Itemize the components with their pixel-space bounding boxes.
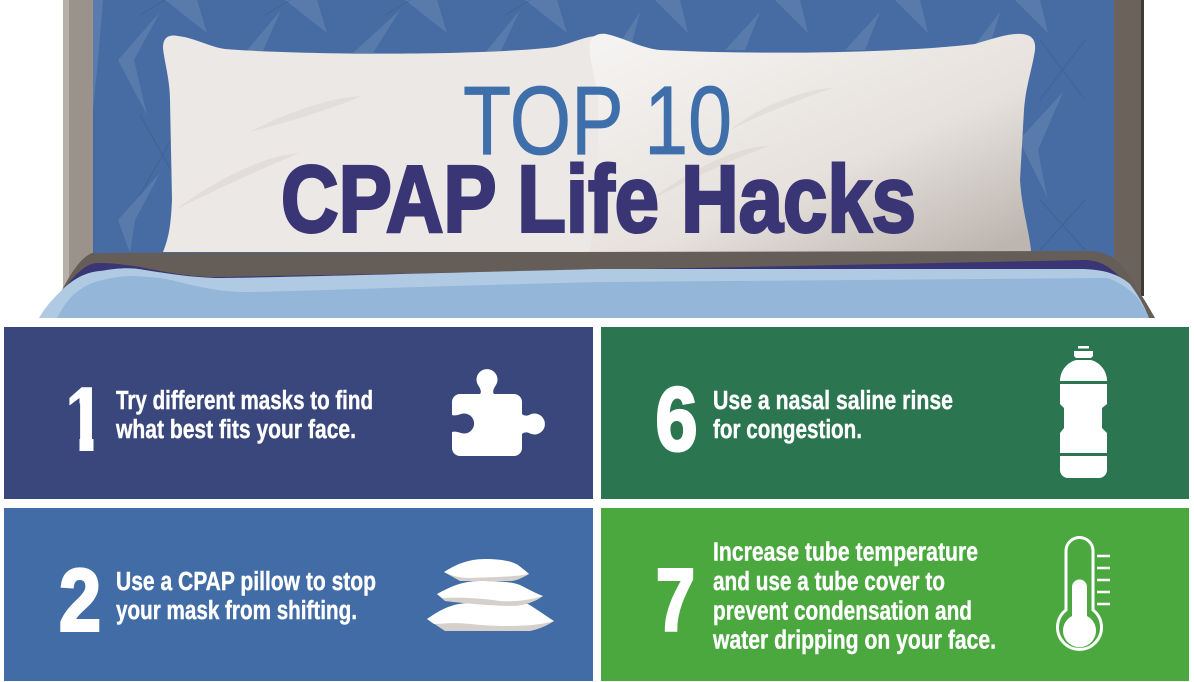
- right pillow: [590, 34, 1035, 252]
- mattress edge: [62, 251, 1155, 318]
- text: hack 2: [116, 568, 376, 625]
- number 6: 6: [656, 370, 698, 470]
- text: hack 1: what best fits your face.: [115, 416, 356, 444]
- title: TOP 10: [463, 66, 732, 175]
- icon: stack of pillows: [427, 559, 554, 631]
- pillow creases: [175, 88, 833, 210]
- number 7: 7: [656, 550, 695, 650]
- icon: puzzle piece: [452, 369, 545, 456]
- title: CPAP Life Hacks: [281, 146, 916, 252]
- text: hack 7: [712, 538, 996, 654]
- text: hack 1: Try different masks to find: [116, 387, 373, 415]
- text: hack 6: for congestion.: [713, 416, 862, 444]
- icon: thermometer: [1058, 538, 1110, 649]
- text: hack 7: Increase tube temperature: [713, 538, 978, 566]
- title: [281, 66, 916, 252]
- text: hack 2: your mask from shifting.: [116, 597, 357, 625]
- left pillow: [163, 36, 620, 252]
- bed sheet shade: [57, 276, 1149, 318]
- panel: hack 1: [4, 327, 593, 499]
- text: hack 7: and use a tube cover to: [713, 568, 945, 596]
- panel: hack 2: [4, 508, 593, 681]
- number 2: 2: [59, 550, 101, 650]
- bed sheet: [39, 268, 1149, 318]
- panel: hack 7: [601, 508, 1189, 681]
- illustration: bed with pillows: [39, 0, 1155, 318]
- headboard frame: [63, 0, 1144, 296]
- text: hack 2: Use a CPAP pillow to stop: [116, 568, 376, 596]
- text: hack 1: [115, 387, 373, 444]
- text: hack 6: Use a nasal saline rinse: [713, 387, 953, 415]
- text: hack 7: water dripping on your face.: [712, 626, 996, 654]
- text: hack 7: prevent condensation and: [713, 598, 972, 626]
- headboard upholstery: [93, 0, 1114, 290]
- navy blanket line: [64, 260, 1126, 296]
- number 1: 1: [66, 370, 102, 469]
- icon: saline bottle: [1060, 346, 1107, 478]
- panel: hack 6: [601, 327, 1189, 499]
- text: hack 6: [713, 387, 953, 444]
